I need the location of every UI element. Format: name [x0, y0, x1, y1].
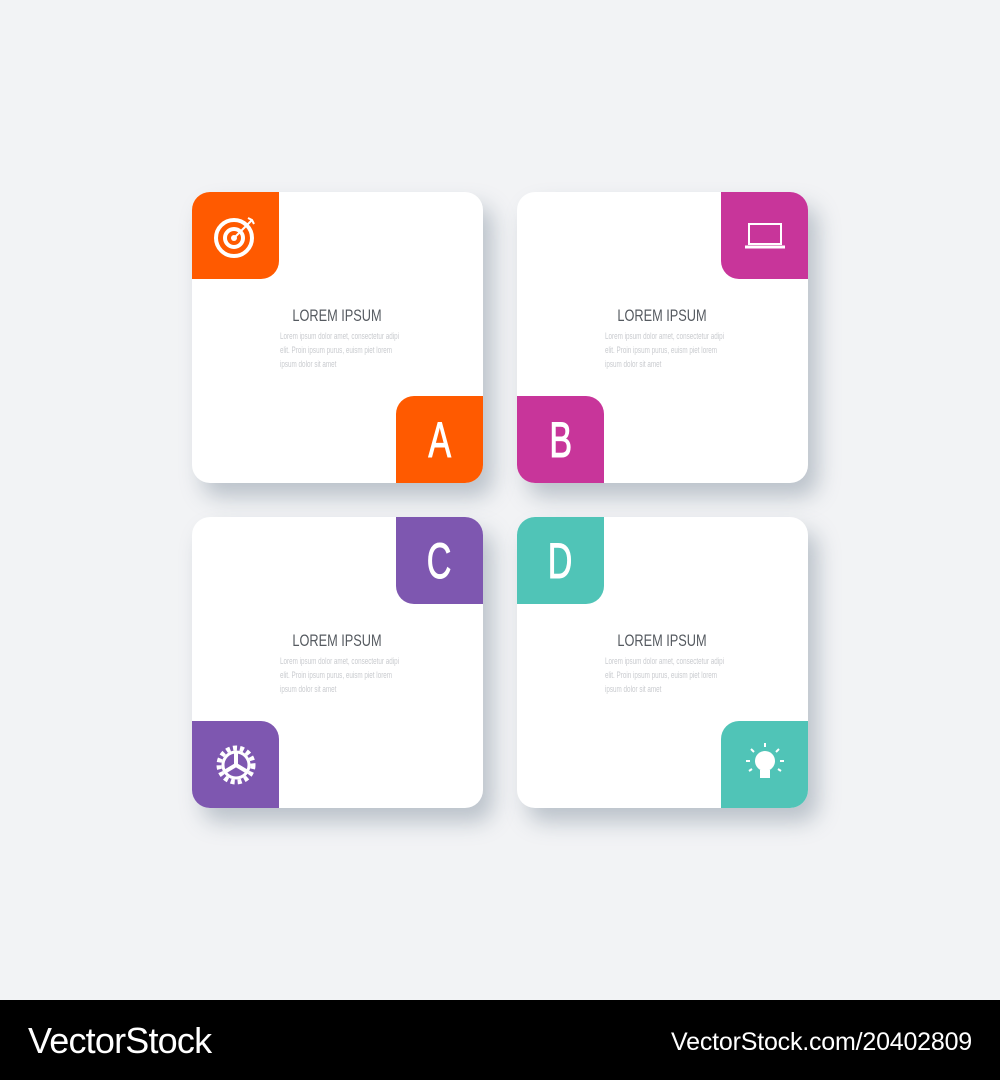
text block C: elit. Proin ipsum purus, euism piet lorem	[280, 670, 392, 680]
text block B: elit. Proin ipsum purus, euism piet lorem	[605, 345, 717, 355]
icon tab: light bulb	[721, 721, 808, 808]
text block A: Lorem ipsum dolor amet, consectetur adipi	[280, 331, 399, 341]
text block A: elit. Proin ipsum purus, euism piet lorem	[280, 345, 392, 355]
text block A: ipsum dolor sit amet	[280, 359, 336, 369]
text block C: Lorem ipsum dolor amet, consectetur adipi	[280, 656, 399, 666]
letter tab A	[396, 396, 483, 483]
text block C: LOREM IPSUM	[292, 631, 382, 650]
icon tab: laptop	[721, 192, 808, 279]
card B	[517, 192, 808, 483]
text block D	[605, 631, 724, 694]
letter tab C: C	[427, 532, 452, 588]
text block B	[605, 306, 724, 369]
text block D: LOREM IPSUM	[617, 631, 707, 650]
footer	[0, 1000, 1000, 1080]
letter tab D	[517, 517, 604, 604]
text block C: ipsum dolor sit amet	[280, 684, 336, 694]
icon tab: target	[192, 192, 279, 279]
card A	[192, 192, 483, 483]
text block A	[280, 306, 399, 369]
text block B: LOREM IPSUM	[617, 306, 707, 325]
letter tab C	[396, 517, 483, 604]
footer url: VectorStock.com/20402809	[671, 1028, 972, 1056]
letter tab A: A	[428, 412, 451, 468]
letter tab B	[517, 396, 604, 483]
text block B: ipsum dolor sit amet	[605, 359, 661, 369]
text block D: ipsum dolor sit amet	[605, 684, 661, 694]
text block C	[280, 631, 399, 694]
text block B: Lorem ipsum dolor amet, consectetur adipi	[605, 331, 724, 341]
letter tab B: B	[549, 412, 572, 468]
footer logo: VectorStock	[28, 1020, 211, 1061]
icon tab: gear	[192, 721, 279, 808]
text block D: elit. Proin ipsum purus, euism piet lorem	[605, 670, 717, 680]
card D	[517, 517, 808, 808]
card C	[192, 517, 483, 808]
text block A: LOREM IPSUM	[292, 306, 382, 325]
text block D: Lorem ipsum dolor amet, consectetur adipi	[605, 656, 724, 666]
letter tab D: D	[548, 532, 573, 588]
